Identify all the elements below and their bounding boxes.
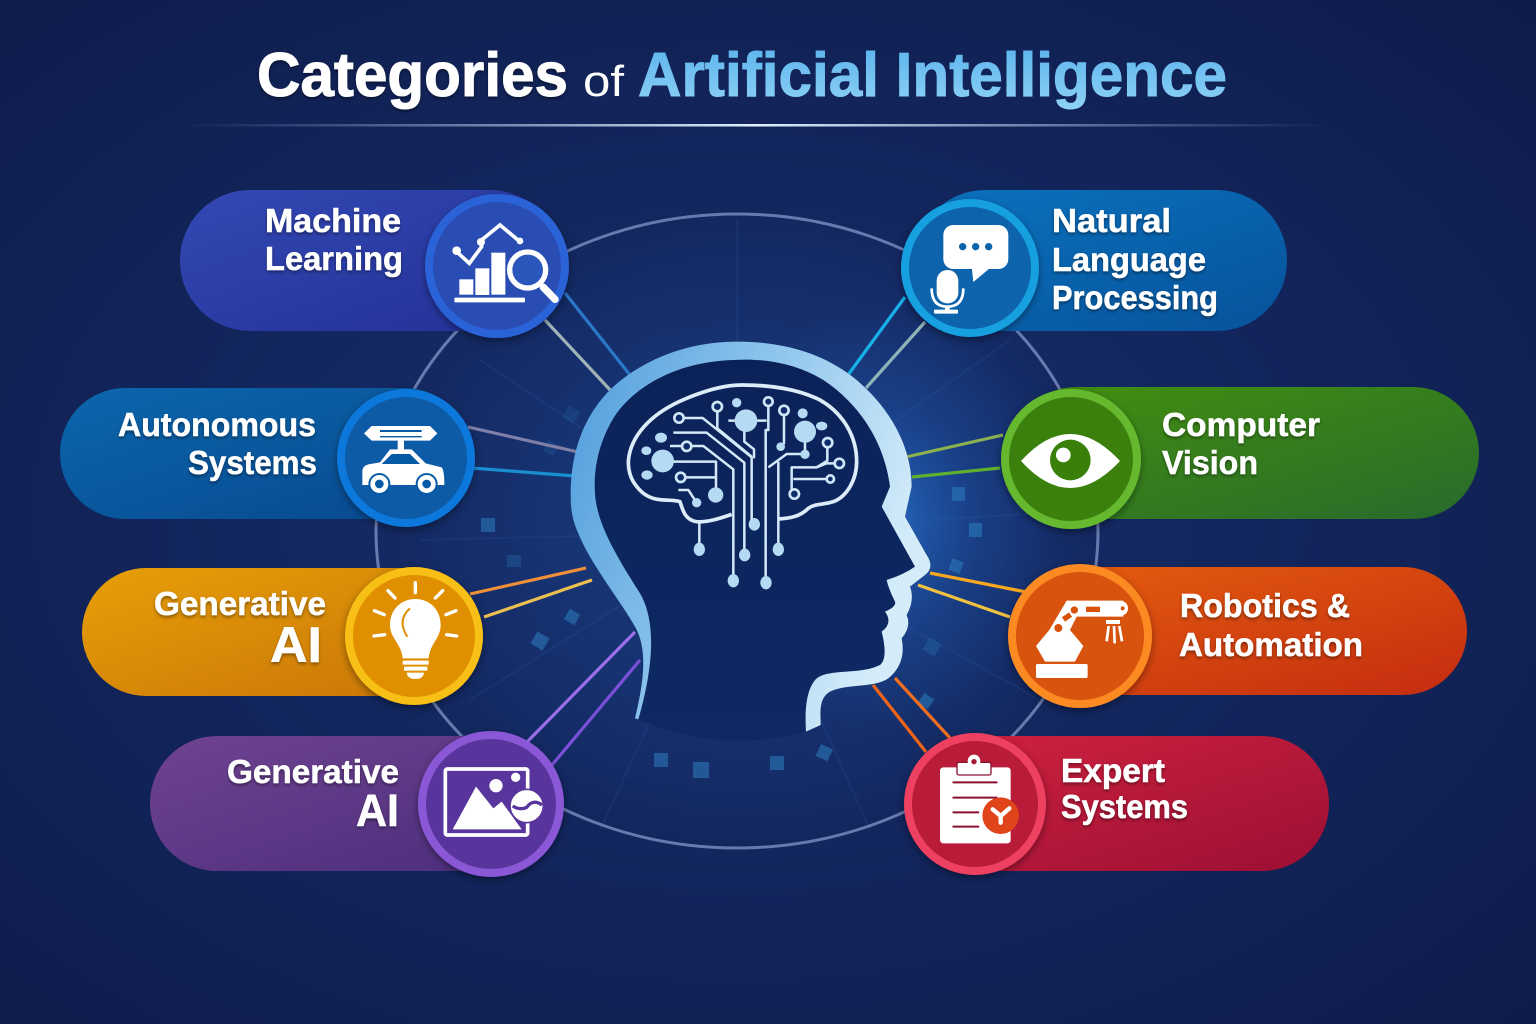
icon: robot arm (1036, 601, 1128, 678)
panel: generative AI orange: Generative (154, 585, 326, 622)
brain outline (628, 385, 857, 522)
panel: computer vision (1005, 387, 1479, 525)
panel: expert systems (908, 736, 1329, 871)
head silhouette (571, 342, 930, 741)
decorative squares (481, 406, 982, 778)
panel: robotics and automation: Robotics & (1180, 587, 1350, 624)
panel: robotics and automation (1012, 567, 1467, 704)
panel: expert systems: Expert (1061, 752, 1165, 789)
panel: machine learning: Learning (265, 240, 403, 277)
connector lines (468, 293, 1026, 765)
title: Categories (257, 41, 568, 110)
panel: generative AI orange: AI (270, 617, 322, 673)
panel: computer vision: Vision (1162, 444, 1258, 481)
panel: natural language processing: Language (1052, 241, 1206, 278)
title (257, 41, 1227, 110)
panel: expert systems: Systems (1061, 788, 1188, 825)
icon: chart and magnifier (452, 225, 555, 302)
head outline (571, 342, 930, 732)
icon: eye (1021, 434, 1120, 488)
panel: generative AI purple: Generative (227, 753, 399, 790)
panel: machine learning: Machine (265, 202, 401, 239)
panel: autonomous systems: Systems (188, 444, 317, 481)
panel: generative AI purple: AI (356, 785, 399, 836)
panel: machine learning (180, 190, 565, 334)
panel: generative AI orange (82, 568, 479, 701)
icon: speech bubble and microphone (932, 225, 1008, 314)
outer orbit ring (376, 214, 1098, 848)
decorative spokes (420, 220, 1090, 830)
panel: generative AI purple (150, 735, 560, 873)
title: of (583, 57, 625, 106)
panel: autonomous systems (60, 388, 471, 523)
panel: natural language processing (905, 190, 1287, 333)
icon: image generation (445, 769, 543, 835)
icon: light bulb (374, 583, 457, 679)
head glow (410, 210, 1090, 850)
panel: autonomous systems: Autonomous (118, 406, 316, 443)
brain circuit traces (663, 402, 839, 583)
icon: clipboard with badge (940, 755, 1019, 843)
panel: computer vision: Computer (1162, 406, 1320, 443)
panel: robotics and automation: Automation (1179, 626, 1363, 663)
panel: natural language processing: Natural (1052, 202, 1171, 239)
title: Artificial Intelligence (638, 41, 1227, 110)
central head with circuit brain (571, 342, 930, 741)
icon: autonomous car (362, 426, 444, 495)
panel: natural language processing: Processing (1052, 279, 1218, 316)
brain circuit nodes (641, 398, 827, 589)
brain ring nodes (674, 397, 844, 499)
